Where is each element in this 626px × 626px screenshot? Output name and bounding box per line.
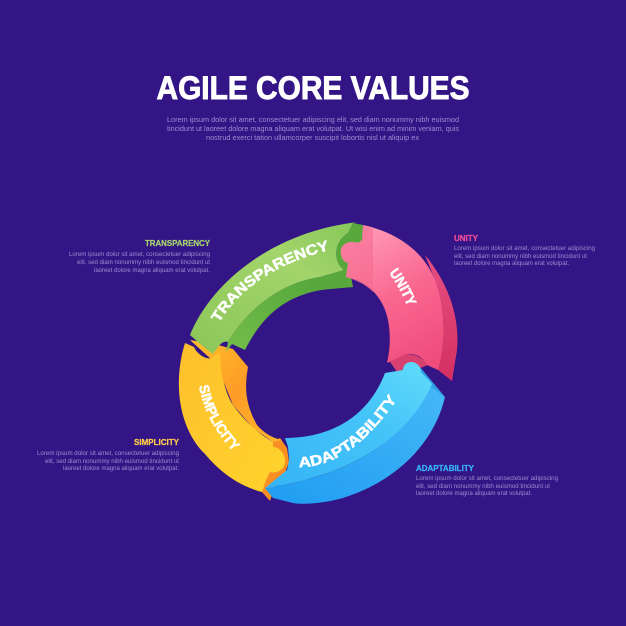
- callout: simplicity: Lorem ipsum dolor sit amet, consectetuer adipiscing: [37, 450, 179, 457]
- label on adaptability: ADAPTABILITY: [299, 393, 395, 468]
- callout: simplicity: laoreet dolore magna aliquam erat volutpat.: [63, 465, 179, 472]
- callout: adaptability: elit, sed diam nonummy nibh euismod tincidunt ut: [416, 483, 550, 490]
- callout: adaptability: [416, 463, 558, 497]
- callout: transparency: TRANSPARENCY: [145, 238, 210, 248]
- label on unity: UNITY: [390, 267, 417, 304]
- callout: adaptability: Lorem ipsum dolor sit amet, consectetuer adipiscing: [416, 475, 558, 482]
- intro text block: Lorem ipsum dolor sit amet, consectetuer adipiscing elit, sed diam nonummy nibh euismod: [167, 115, 459, 124]
- callout: unity: laoreet dolore magna aliquam erat volutpat.: [454, 260, 569, 267]
- segment: transparency: [190, 222, 363, 354]
- segment: simplicity: [178, 340, 289, 501]
- segment: unity: [340, 225, 458, 381]
- callout: unity: [454, 233, 595, 267]
- callout: unity: UNITY: [454, 233, 478, 243]
- label on transparency: TRANSPARENCY: [210, 240, 327, 320]
- callout: simplicity: elit, sed diam nonummy nibh euismod tincidunt ut: [45, 458, 179, 465]
- callout: adaptability: ADAPTABILITY: [416, 463, 474, 473]
- title: AGILE CORE VALUES: [156, 70, 470, 106]
- callout: simplicity: SIMPLICITY: [134, 437, 179, 447]
- intro text block: nostrud exerci tation ullamcorper suscipit lobortis nisl ut aliquip ex: [206, 133, 419, 142]
- callout: adaptability: laoreet dolore magna aliquam erat volutpat.: [416, 490, 532, 497]
- segment: adaptability: [265, 362, 445, 504]
- intro text block: [167, 115, 459, 142]
- callout: transparency: Lorem ipsum dolor sit amet, consectetuer adipiscing: [69, 251, 210, 258]
- label on simplicity: SIMPLICITY: [199, 384, 241, 450]
- intro text block: tincidunt ut laoreet dolore magna aliquam erat volutpat. Ut wisi enim ad minim veniam, quis: [167, 124, 459, 133]
- callout: transparency: [69, 238, 210, 274]
- callout: transparency: elit, sed diam nonummy nibh euismod tincidunt ut: [77, 259, 210, 266]
- callout: simplicity: [37, 437, 179, 472]
- callout: unity: Lorem ipsum dolor sit amet, consectetuer adipiscing: [454, 245, 595, 252]
- callout: transparency: laoreet dolore magna aliquam erat volutpat.: [94, 267, 210, 274]
- ring diagram: [178, 222, 458, 504]
- callout: unity: elit, sed diam nonummy nibh euismod tincidunt ut: [454, 253, 587, 260]
